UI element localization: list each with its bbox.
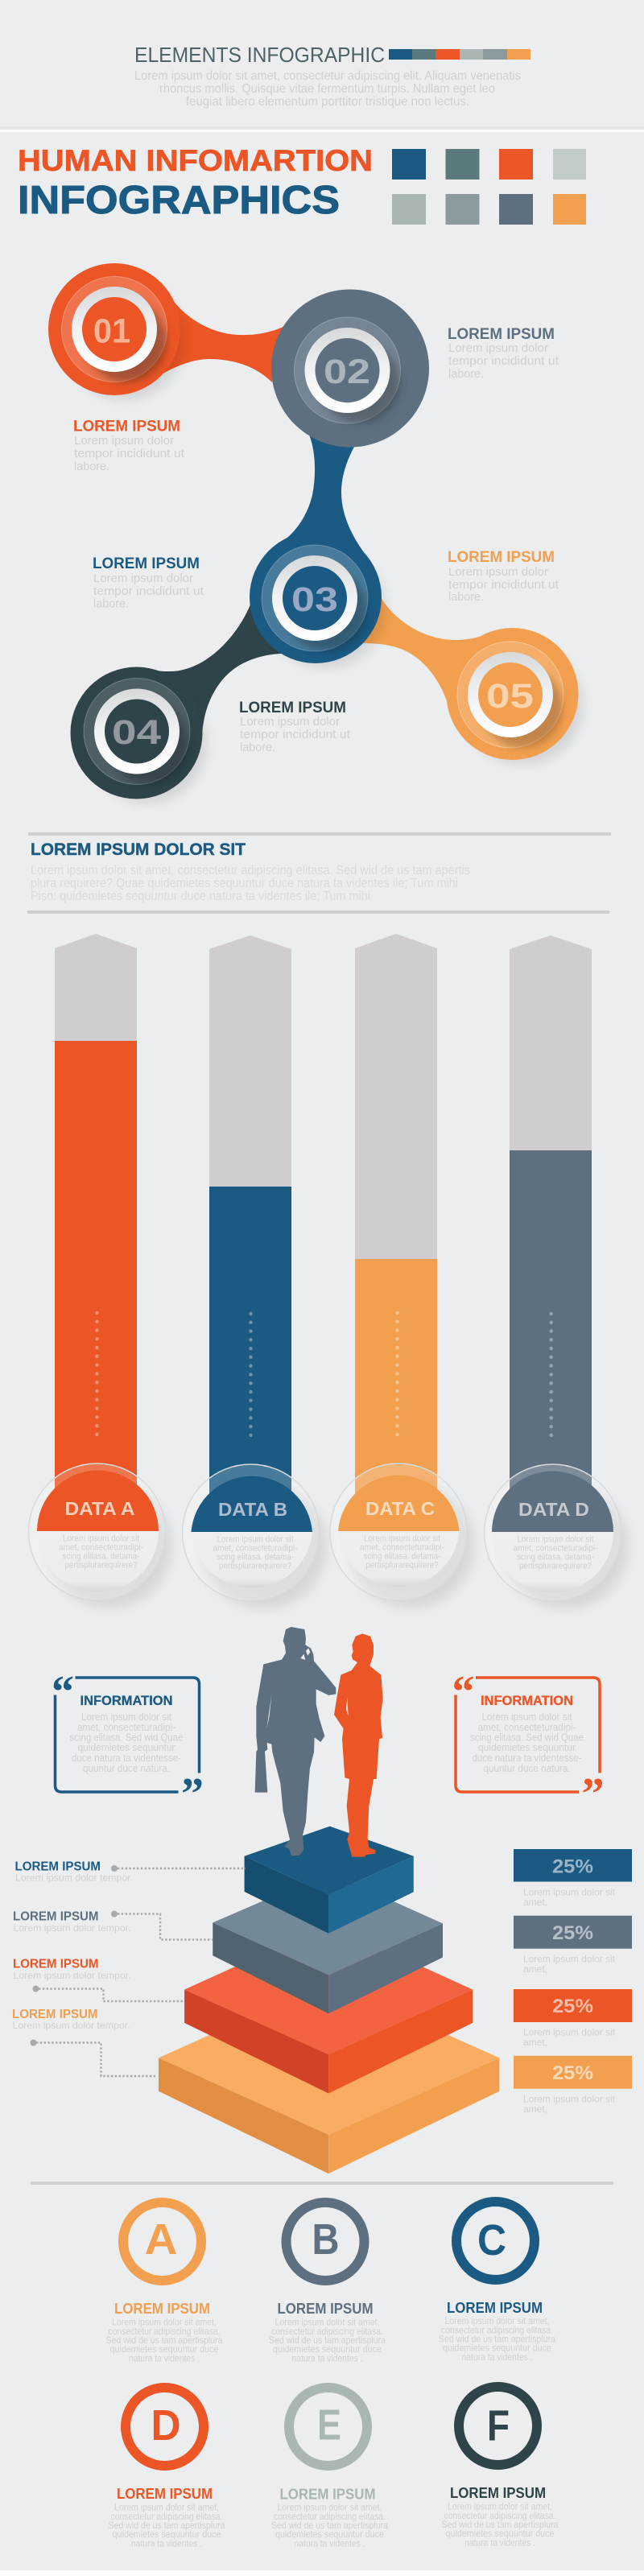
item C: LOREM IPSUM [447, 2300, 543, 2316]
label 02: Lorem ipsum dolor [448, 341, 548, 355]
node 04: 04 [112, 713, 161, 752]
bar B: scing elitasa. detama- [217, 1552, 294, 1562]
quote box: information orange: quuntur duce natura. [483, 1763, 570, 1774]
bar C [330, 934, 474, 1608]
item D: Sed wid de us tam apertisplura [108, 2520, 225, 2531]
main title: HUMAN INFOMARTION [18, 144, 373, 177]
bar D: DATA D [518, 1499, 589, 1520]
pyramid label 4: Lorem ipsum dolor tempor. [13, 2020, 130, 2031]
item E: natura ta videntes . [295, 2537, 365, 2549]
item F: natura ta videntes . [464, 2537, 535, 2549]
node 01 [48, 263, 184, 400]
icon: ring E [289, 2388, 367, 2466]
bar B: Lorem ipsum dolor sit [217, 1534, 293, 1544]
percentage 2: Lorem ipsum dolor sit [523, 1953, 616, 1964]
item B: Lorem ipsum dolor sit amet, [275, 2317, 380, 2328]
item F: LOREM IPSUM [450, 2485, 546, 2501]
quote box: information orange: “ [452, 1667, 475, 1717]
label 02: tempor incididunt ut [448, 354, 559, 368]
pyramid label 2 [13, 1909, 213, 1940]
section heading: lorem ipsum dolor sit: LOREM IPSUM DOLOR SIT [31, 840, 246, 859]
item A: Lorem ipsum dolor sit amet, [112, 2317, 217, 2328]
header description: rhoncus mollis. Quisque vitae fermentum turpis. Nullam eget leo [159, 82, 495, 96]
percentage 3: Lorem ipsum dolor sit [523, 2027, 616, 2038]
quote box: information blue: scing elitasa. Sed wid Quae [69, 1732, 184, 1744]
section heading: lorem ipsum dolor sit: Lorem ipsum dolor sit amet, consectetur adipiscing elitasa. Sed wid de us tam apertis [31, 864, 470, 877]
label 03: LOREM IPSUM [93, 555, 200, 572]
percentage 4: 25% [552, 2062, 593, 2084]
icon: ring B: B [312, 2215, 340, 2264]
percentage 4 [514, 2056, 632, 2115]
icon: ring F [459, 2387, 537, 2465]
quote box: information orange: scing elitasa. Sed wid Quae [470, 1732, 584, 1744]
connector 03 to 04 [148, 605, 283, 737]
item E: quidemietes sequuntur duce [275, 2529, 384, 2540]
percentage 1 [514, 1849, 632, 1908]
bar C: scing elitasa. detama- [364, 1552, 441, 1562]
item D: consectetur adipiscing elitasa. [111, 2511, 222, 2522]
quote box: information blue: Lorem ipsum dolor sit [81, 1711, 171, 1723]
quote box: information orange [452, 1667, 604, 1819]
node 03 [250, 531, 386, 668]
connector 02 to 03 [283, 435, 366, 555]
quote box: information blue: amet, consecteturadipi- [77, 1722, 175, 1733]
item F [441, 2387, 559, 2549]
bar B: pertisplurarequirere? [219, 1562, 291, 1571]
label 02: LOREM IPSUM [448, 326, 555, 343]
item C: quidemietes sequuntur duce [443, 2343, 551, 2354]
item A: quidemietes sequuntur duce [109, 2343, 219, 2355]
item E: LOREM IPSUM [280, 2486, 375, 2502]
label 04: labore. [240, 741, 275, 754]
silhouette: businesswoman [334, 1633, 383, 1857]
label 01: LOREM IPSUM [73, 419, 180, 435]
icon: ring E: E [317, 2401, 341, 2449]
bar D: scing elitasa. detama- [517, 1552, 594, 1562]
pyramid label 3: Lorem ipsum dolor tempor. [13, 1970, 130, 1981]
pyramid label 1 [14, 1860, 246, 1884]
percentage 2 [514, 1916, 632, 1975]
percentage 4: amet, [523, 2103, 547, 2115]
node 01: 01 [93, 312, 130, 351]
bar D: pertisplurarequirere? [519, 1562, 592, 1571]
section heading: lorem ipsum dolor sit [31, 840, 470, 903]
item E: consectetur adipiscing elitasa. [274, 2511, 386, 2522]
pyramid label 2: LOREM IPSUM [13, 1909, 98, 1924]
bar C: DATA C [365, 1498, 435, 1519]
item B: natura ta videntes . [291, 2352, 362, 2363]
process diagram: connected nodes 01 to 05 [48, 263, 583, 803]
bar D: amet, consecteturadipi- [514, 1544, 598, 1554]
item E [271, 2388, 388, 2549]
quote box: information blue: ” [181, 1769, 204, 1819]
label 01: Lorem ipsum dolor [74, 434, 174, 448]
bar D: Lorem ipsum dolor sit [517, 1534, 594, 1544]
layer 2: grey [213, 1872, 443, 2013]
item E: Sed wid de us tam apertisplura [271, 2520, 388, 2531]
silhouette: businessman [255, 1627, 336, 1856]
label 04 [239, 700, 351, 754]
percentage 1: amet, [523, 1897, 547, 1908]
bar C: Lorem ipsum dolor sit [364, 1534, 440, 1544]
quote box: information blue: quuntur duce natura. [83, 1763, 170, 1774]
item C: natura ta videntes . [462, 2351, 533, 2363]
node 02: 02 [324, 353, 370, 391]
node 04 [71, 667, 207, 803]
item C: Sed wid de us tam apertisplura [439, 2333, 555, 2344]
pyramid label 1: Lorem ipsum dolor tempor. [15, 1872, 133, 1884]
label 05: LOREM IPSUM [448, 549, 555, 566]
label 03: Lorem ipsum dolor [93, 572, 193, 585]
label 02 [448, 326, 559, 381]
layer 4: orange [159, 1981, 499, 2174]
bar A: Lorem ipsum dolor sit [63, 1534, 139, 1544]
bar B: DATA B [218, 1499, 287, 1520]
header description [134, 69, 521, 109]
bar A: amet, consecteturadipi- [59, 1542, 143, 1552]
item E: Lorem ipsum dolor sit amet, [277, 2502, 382, 2513]
connector 03 to 05 [363, 597, 491, 708]
header description: Lorem ipsum dolor sit amet, consectetur adipiscing elit. Aliquam venenatis [134, 69, 521, 83]
label 05: tempor incididunt ut [448, 578, 559, 592]
bar A: pertisplurarequirere? [64, 1560, 137, 1570]
percentage 3: amet, [523, 2037, 547, 2048]
icon: ring A: A [145, 2215, 177, 2264]
quote box: information orange: ” [581, 1769, 604, 1819]
bar A [29, 934, 172, 1608]
item C: consectetur adipiscing elitasa. [441, 2325, 553, 2336]
item B [269, 2202, 386, 2363]
label 05: Lorem ipsum dolor [448, 565, 548, 579]
quote box: information orange: amet, consecteturadipi- [478, 1722, 576, 1733]
label 05 [448, 549, 559, 604]
icon: ring A [123, 2202, 201, 2281]
main title: INFOGRAPHICS [18, 179, 340, 222]
header: elements infographic [134, 43, 530, 109]
percentage 2: amet, [523, 1963, 547, 1975]
bar D [485, 935, 629, 1609]
quote box: information blue: duce natura ta videntesse- [72, 1752, 181, 1764]
label 03: labore. [93, 597, 129, 610]
quote box: information blue: quidemietes sequuntur [77, 1742, 175, 1753]
header description: feugiat libero elementum porttitor tristique non lectus. [186, 95, 469, 109]
item A [106, 2202, 223, 2363]
icon: ring D [126, 2388, 204, 2466]
isometric pyramid [159, 1827, 499, 2174]
item D: LOREM IPSUM [117, 2486, 213, 2502]
percentage 1: Lorem ipsum dolor sit [523, 1887, 616, 1898]
bar B [182, 935, 327, 1609]
item A: consectetur adipiscing elitasa. [108, 2326, 221, 2337]
item A: natura ta videntes . [129, 2352, 200, 2363]
colour swatches [392, 149, 586, 225]
bar chart: data A to D [29, 934, 629, 1609]
bar A: scing elitasa. detama- [63, 1552, 140, 1562]
label 04: tempor incididunt ut [240, 728, 351, 741]
section heading: lorem ipsum dolor sit: Piso: quidemietes sequuntur duce natura ta videntes ile; Tum mihi [31, 890, 370, 903]
pyramid label 3: LOREM IPSUM [13, 1958, 98, 1971]
label 02: labore. [448, 367, 484, 381]
item A: LOREM IPSUM [114, 2301, 210, 2317]
bar A: DATA A [64, 1498, 135, 1519]
icon: ring C: C [477, 2216, 506, 2264]
item D: natura ta videntes . [131, 2537, 202, 2549]
icon: ring D: D [151, 2401, 180, 2450]
node 02 [271, 290, 429, 448]
item B: consectetur adipiscing elitasa. [271, 2326, 383, 2337]
icon: ring B [287, 2202, 364, 2281]
label 03: tempor incididunt ut [93, 584, 204, 598]
colour strip [389, 49, 530, 60]
layer 3: red [184, 1924, 473, 2094]
pyramid label 2: Lorem ipsum dolor tempor. [13, 1922, 130, 1934]
pyramid label 3 [13, 1958, 183, 2001]
item D [108, 2388, 225, 2549]
item C: Lorem ipsum dolor sit amet, [444, 2315, 549, 2326]
layer 1: blue [245, 1827, 414, 1934]
pyramid label 4 [12, 2008, 157, 2076]
bar C: amet, consecteturadipi- [360, 1542, 444, 1552]
label 01 [73, 419, 185, 473]
quote box: information blue: INFORMATION [80, 1693, 172, 1708]
label 01: labore. [74, 460, 109, 473]
item D: quidemietes sequuntur duce [113, 2529, 221, 2540]
main title [18, 144, 373, 222]
pyramid label 4: LOREM IPSUM [12, 2008, 98, 2021]
section heading: lorem ipsum dolor sit: plura requirere? Quae quidemietes sequuntur duce natura ta videntes ile; Tum mihi [31, 877, 458, 890]
bar B: amet, consecteturadipi- [213, 1544, 298, 1554]
quote box: information orange: Lorem ipsum dolor sit [481, 1711, 572, 1723]
quote box: information orange: quidemietes sequuntur [478, 1742, 576, 1753]
header title: ELEMENTS INFOGRAPHIC [134, 43, 385, 67]
percentage 3 [514, 1989, 632, 2048]
quote box: information blue [52, 1667, 204, 1819]
quote box: information orange: INFORMATION [481, 1693, 573, 1708]
node 03: 03 [291, 580, 338, 619]
percentage 2: 25% [552, 1922, 593, 1944]
label 03 [93, 555, 204, 610]
item F: consectetur adipiscing elitasa. [444, 2510, 555, 2521]
item A: Sed wid de us tam apertisplura [106, 2334, 223, 2346]
quote box: information blue: “ [52, 1667, 74, 1717]
percentage 3: 25% [552, 1996, 593, 2017]
item C [439, 2202, 555, 2363]
bar C: pertisplurarequirere? [365, 1560, 438, 1570]
label 04: LOREM IPSUM [239, 700, 346, 716]
item F: Sed wid de us tam apertisplura [441, 2519, 559, 2530]
item D: Lorem ipsum dolor sit amet, [114, 2502, 219, 2513]
item F: quidemietes sequuntur duce [446, 2528, 555, 2539]
item B: quidemietes sequuntur duce [273, 2343, 382, 2355]
pyramid label 1: LOREM IPSUM [14, 1860, 101, 1874]
item B: LOREM IPSUM [277, 2301, 374, 2317]
item B: Sed wid de us tam apertisplura [269, 2334, 386, 2346]
label 04: Lorem ipsum dolor [240, 715, 340, 729]
label 01: tempor incididunt ut [74, 447, 185, 460]
percentage 1: 25% [552, 1856, 593, 1877]
icon: ring F: F [487, 2402, 510, 2450]
quote box: information orange: duce natura ta videntesse- [472, 1752, 581, 1764]
item F: Lorem ipsum dolor sit amet, [448, 2500, 552, 2512]
icon: ring C [456, 2202, 535, 2280]
connector 01 to 02 [160, 299, 283, 382]
node 05 [446, 628, 583, 765]
node 05: 05 [486, 677, 534, 716]
label 05: labore. [448, 590, 484, 604]
percentage 4: Lorem ipsum dolor sit [523, 2093, 616, 2104]
